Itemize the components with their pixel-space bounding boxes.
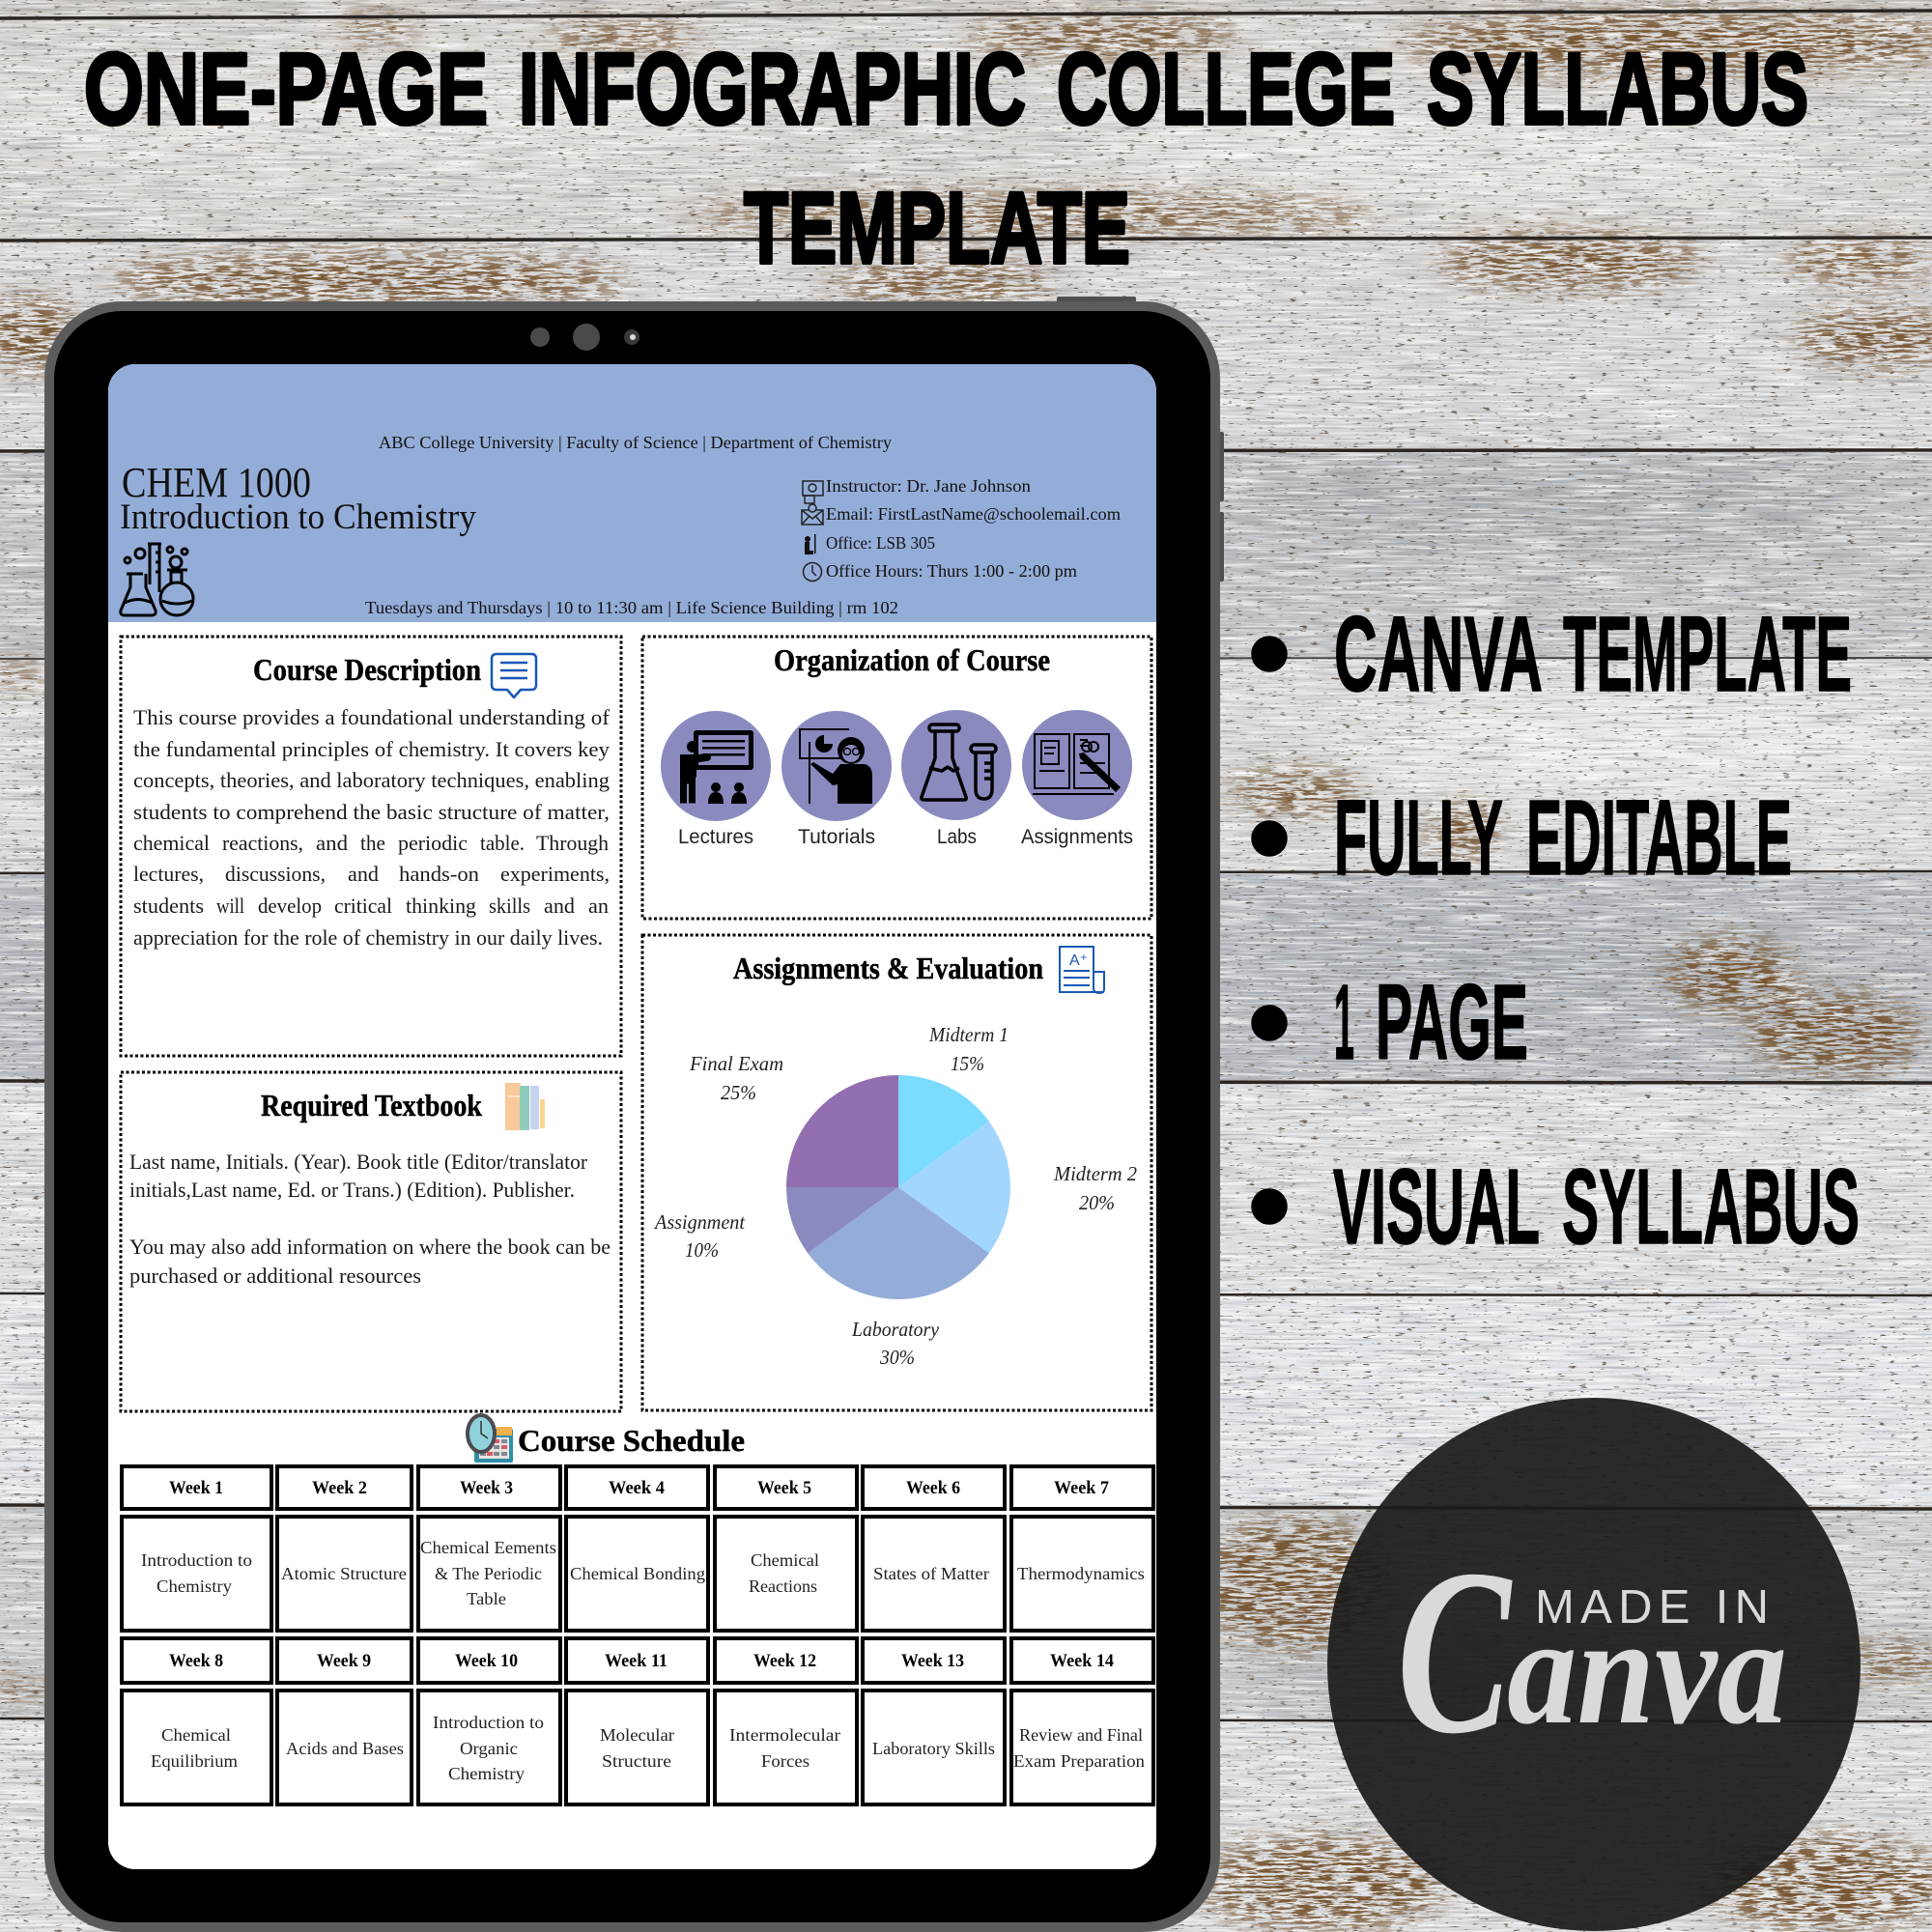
schedule table <box>122 1466 1153 1804</box>
description text: skills <box>489 894 530 918</box>
pie labels: Assignment <box>653 1210 746 1234</box>
week topics: Chemical <box>161 1725 231 1745</box>
item: labs <box>901 710 1011 820</box>
contact: office hours: Office Hours: Thurs 1:00 - 2:00 pm <box>826 561 1077 581</box>
screen <box>108 364 1156 1869</box>
bullet: 1 page <box>1252 963 1528 1082</box>
course components labels: Tutorials <box>798 826 875 848</box>
description text: students <box>133 894 204 918</box>
icon: lab flasks <box>121 544 193 615</box>
heading: Organization of Course <box>774 642 1050 677</box>
pie labels: 30% <box>879 1346 915 1369</box>
week topics: & The Periodic <box>435 1564 542 1583</box>
pie labels: 20% <box>1079 1191 1115 1214</box>
heading: Assignments & Evaluation <box>733 951 1043 985</box>
class time line: Tuesdays and Thursdays | 10 to 11:30 am | Life Science Building | rm 102 <box>365 598 898 617</box>
week headers: Week 10 <box>455 1651 518 1671</box>
bullet: fully editable: FULLY <box>1334 779 1503 897</box>
tablet side buttons <box>1057 297 1224 582</box>
week headers: Week 14 <box>1050 1651 1114 1671</box>
pie labels: 10% <box>685 1238 719 1262</box>
tablet cameras <box>530 324 639 351</box>
icon: graded paper: A⁺ <box>1069 952 1088 969</box>
week headers: Week 1 <box>169 1478 223 1498</box>
bullet: 1 page: 1 <box>1334 963 1354 1082</box>
week headers <box>169 1478 1114 1671</box>
header band <box>108 364 1156 622</box>
week topics: Chemistry <box>448 1764 525 1783</box>
contact: instructor: Instructor: Dr. Jane Johnson <box>826 476 1031 496</box>
course code: CHEM 1000 <box>122 459 311 506</box>
pie chart <box>786 1075 1010 1299</box>
description text: This course provides a foundational understanding of <box>133 705 611 729</box>
week headers: Week 5 <box>757 1478 811 1498</box>
week topics: Introduction to <box>433 1713 544 1732</box>
description text: will <box>216 894 244 918</box>
week topics: Chemistry <box>156 1577 232 1596</box>
week topics: Structure <box>602 1751 671 1771</box>
panel: required textbook <box>121 1072 621 1411</box>
title: COLLEGE <box>1057 33 1395 146</box>
description text <box>133 705 611 950</box>
week headers: Week 13 <box>901 1651 964 1671</box>
panel: organization of course <box>642 637 1151 919</box>
course components labels: Assignments <box>1021 826 1133 848</box>
week topics: Chemical <box>751 1550 819 1570</box>
title: INFOGRAPHIC <box>519 33 1026 146</box>
description text: students to comprehend the basic structure of matter, <box>133 800 610 824</box>
course components labels: Lectures <box>678 826 753 848</box>
description text: thinking <box>406 894 476 918</box>
pie labels: 15% <box>951 1052 984 1075</box>
week topics: Chemical Eements <box>420 1538 556 1557</box>
canva logotype <box>1397 1520 1787 1782</box>
week headers: Week 8 <box>169 1651 223 1671</box>
pie labels: 25% <box>721 1081 756 1104</box>
item: lectures <box>661 711 771 821</box>
pie labels <box>653 1023 1137 1369</box>
week topics: Equilibrium <box>151 1751 238 1771</box>
bullet: canva template: CANVA <box>1334 595 1543 714</box>
week headers: Week 11 <box>605 1651 668 1671</box>
description text: table. <box>480 831 525 855</box>
course schedule heading: Course Schedule <box>518 1423 745 1458</box>
description text: concepts, theories, and laboratory techniques, enabling <box>133 768 610 792</box>
week headers: Week 7 <box>1054 1478 1109 1498</box>
description text: and <box>316 831 348 855</box>
description text: an <box>588 894 609 918</box>
bullet: visual syllabus <box>1252 1148 1860 1266</box>
icon: clock and calendar <box>468 1415 513 1463</box>
contact: office: Office: LSB 305 <box>826 533 935 553</box>
heading: Course Description <box>253 652 481 687</box>
panel: course description <box>121 637 621 1056</box>
week topics: Chemical Bonding <box>570 1564 705 1583</box>
week headers: Week 12 <box>753 1651 816 1671</box>
week headers: Week 4 <box>609 1478 665 1498</box>
canva logotype: C <box>1397 1520 1513 1782</box>
week headers: Week 2 <box>312 1478 367 1498</box>
week headers: Week 9 <box>317 1651 371 1671</box>
description text: the <box>360 831 385 855</box>
tablet device <box>44 297 1224 1932</box>
week headers: Week 3 <box>460 1478 513 1498</box>
course components labels: Labs <box>937 826 977 848</box>
week topics: Exam Preparation <box>1013 1751 1145 1771</box>
pie labels: Midterm 1 <box>928 1023 1009 1046</box>
description text: chemical <box>133 831 210 855</box>
description text: hands-on <box>399 862 479 886</box>
icon: speech bubble <box>492 654 536 697</box>
week topics: Table <box>467 1589 506 1608</box>
week topics: Introduction to <box>141 1550 252 1570</box>
textbook text: You may also add information on where the book can be <box>129 1235 611 1259</box>
week topics: Review and Final <box>1019 1725 1143 1745</box>
description text: and <box>348 862 379 886</box>
title: TEMPLATE <box>744 172 1130 285</box>
description text: critical <box>334 894 392 918</box>
contact: instructor <box>803 476 1031 503</box>
week topics: Intermolecular <box>729 1725 840 1745</box>
panel: assignments and evaluation <box>642 935 1151 1410</box>
week topics <box>141 1538 1145 1783</box>
institution line: ABC College University | Faculty of Science | Department of Chemistry <box>379 433 892 452</box>
bullet: fully editable <box>1252 779 1792 897</box>
tablet bezel <box>54 311 1210 1922</box>
week topics: Reactions <box>749 1577 817 1596</box>
feature list <box>1252 595 1860 1266</box>
item: assignments <box>1022 710 1132 820</box>
course schedule heading <box>468 1415 745 1463</box>
week topics: Forces <box>761 1751 810 1771</box>
icon: graded paper <box>1060 947 1104 993</box>
title: ONE-PAGE <box>84 33 488 146</box>
week headers: Week 6 <box>906 1478 960 1498</box>
week topics: Atomic Structure <box>281 1564 407 1583</box>
bullet: canva template <box>1252 595 1852 714</box>
week topics: Thermodynamics <box>1017 1564 1145 1583</box>
description text: the fundamental principles of chemistry. It covers key <box>133 737 610 761</box>
week topics: Molecular <box>600 1725 674 1745</box>
week topics: Acids and Bases <box>286 1739 404 1758</box>
pie labels: Midterm 2 <box>1053 1162 1137 1185</box>
made in canva badge <box>1327 1398 1861 1931</box>
pie labels: Laboratory <box>851 1318 940 1341</box>
description text: appreciation for the role of chemistry in our daily lives. <box>133 925 603 950</box>
course components labels <box>678 826 1133 848</box>
textbook text: Last name, Initials. (Year). Book title (Editor/translator <box>129 1150 588 1174</box>
tablet frame <box>44 301 1220 1932</box>
description text: lectures, <box>133 862 204 886</box>
description text: Through <box>536 831 609 855</box>
icon: books <box>505 1083 545 1130</box>
title <box>84 33 1808 285</box>
heading: Required Textbook <box>261 1088 482 1122</box>
week topics: Organic <box>460 1739 518 1758</box>
textbook text: initials,Last name, Ed. or Trans.) (Edition). Publisher. <box>129 1178 575 1202</box>
description text: experiments, <box>500 862 610 886</box>
description text: and <box>544 894 575 918</box>
pie labels: Final Exam <box>689 1052 783 1075</box>
textbook text: purchased or additional resources <box>129 1264 421 1288</box>
textbook text <box>129 1150 611 1288</box>
bullet: visual syllabus: VISUAL <box>1333 1148 1540 1266</box>
description text: reactions, <box>222 831 303 855</box>
bullet: 1 page: PAGE <box>1376 963 1528 1082</box>
description text: discussions, <box>225 862 326 886</box>
canva logotype: anva <box>1507 1584 1787 1756</box>
item: tutorials <box>781 711 892 821</box>
table cells <box>122 1466 1153 1804</box>
description text: develop <box>258 894 322 918</box>
contact: email: Email: FirstLastName@schoolemail.com <box>826 504 1121 524</box>
description text: periodic <box>398 831 468 855</box>
week topics: States of Matter <box>873 1564 989 1583</box>
made in label: MADE IN <box>1535 1581 1769 1634</box>
week topics: Laboratory Skills <box>872 1739 995 1758</box>
course name: Introduction to Chemistry <box>120 497 476 537</box>
